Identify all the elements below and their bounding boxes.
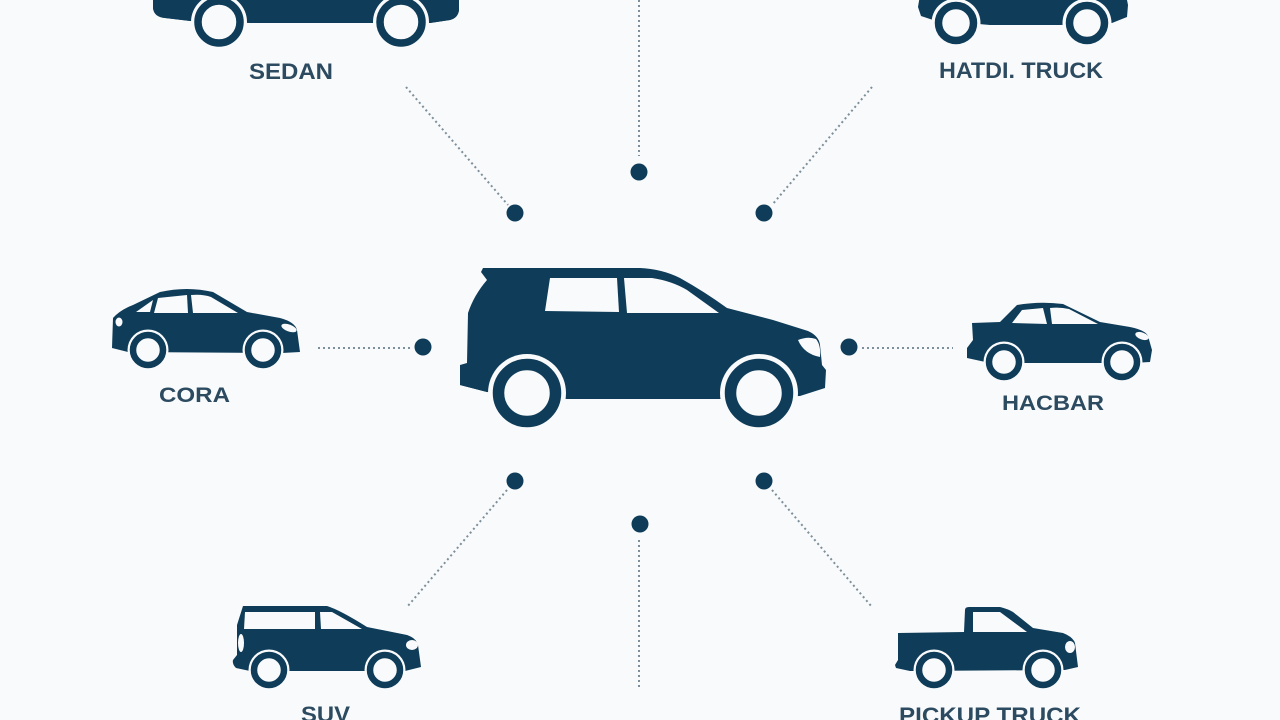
icon: central vehicle bbox=[460, 268, 826, 432]
connector: suv bbox=[407, 472, 524, 607]
connector: cora bbox=[318, 338, 432, 356]
label: hacbar: HACBAR bbox=[1002, 392, 1104, 415]
connector: bottom centre bbox=[632, 516, 648, 690]
icon: hatch truck bbox=[918, 0, 1128, 48]
connector: hacbar bbox=[840, 338, 953, 356]
icon: hacbar car bbox=[967, 303, 1152, 382]
connector: hatch truck bbox=[756, 87, 872, 222]
icon: sedan bbox=[153, 0, 459, 50]
icon: suv bbox=[233, 606, 421, 690]
connector: sedan bbox=[406, 87, 524, 222]
label: cora: CORA bbox=[159, 384, 230, 407]
connector: top centre bbox=[630, 0, 648, 180]
icon: cora car bbox=[112, 289, 300, 370]
icon: pickup truck bbox=[895, 607, 1078, 690]
label: hatch truck: HATDI. TRUCK bbox=[939, 58, 1103, 83]
label: sedan: SEDAN bbox=[249, 59, 333, 84]
connector: pickup truck bbox=[756, 472, 872, 607]
